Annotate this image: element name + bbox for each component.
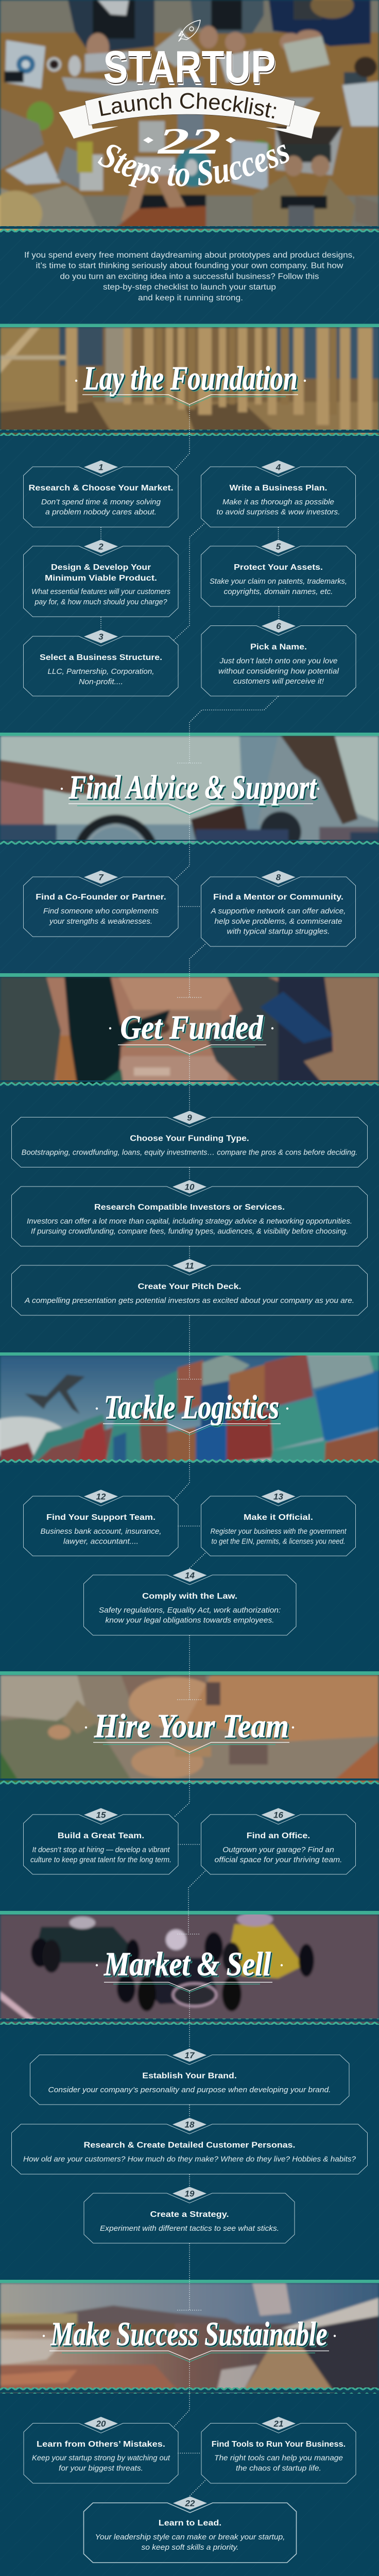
step title: Find Tools to Run Your Business.: [212, 2440, 346, 2449]
panel: Tackle Logistics steps: [0, 1465, 379, 1671]
step title: Find Your Support Team.: [46, 1513, 156, 1522]
heading: Lay the Foundation: [75, 360, 306, 406]
panel: Lay the Foundation steps: [0, 435, 379, 733]
step badge 3: [84, 630, 118, 643]
step description: [47, 668, 154, 686]
step badge 6: [262, 619, 296, 633]
step title: Research & Choose Your Market.: [29, 484, 173, 493]
card: step 1: [24, 461, 178, 527]
step description: Experiment with different tactics to see what sticks.: [100, 2225, 279, 2233]
step badge 21: 21: [273, 2419, 283, 2429]
step description: The right tools can help you manage: [214, 2454, 343, 2463]
step description: Safety regulations, Equality Act, work authorization:: [99, 1606, 281, 1615]
step description: with typical startup struggles.: [227, 927, 330, 936]
step description: [27, 1217, 352, 1235]
step title: Comply with the Law.: [142, 1592, 237, 1601]
step title: Choose Your Funding Type.: [130, 1134, 249, 1143]
step description: Make it as thorough as possible: [222, 498, 334, 506]
step description: Keep your startup strong by watching out: [32, 2454, 170, 2463]
wave divider: [0, 430, 379, 436]
step badge 1: 1: [98, 463, 104, 472]
step description: [210, 1528, 347, 1546]
banner photo: house framing: [0, 327, 379, 435]
step description: so keep soft skills a priority.: [141, 2544, 239, 2552]
title block: [59, 20, 320, 188]
step badge 12: [84, 1490, 118, 1503]
step title: Establish Your Brand.: [142, 2072, 237, 2080]
step description: for your biggest threats.: [59, 2465, 143, 2473]
step description: [95, 2533, 285, 2552]
card: step 16: [201, 1808, 355, 1874]
step title: Write a Business Plan.: [230, 484, 328, 493]
card: step 13: [201, 1490, 355, 1556]
step badge 11: 11: [185, 1261, 194, 1270]
card: step 6: [201, 619, 356, 696]
teal band: [0, 1671, 379, 1675]
wave divider: [0, 226, 379, 232]
card: step 10: [11, 1180, 368, 1246]
step description: It doesn’t stop at hiring — develop a vibrant: [32, 1846, 170, 1854]
step description: to avoid surprises & wow investors.: [216, 508, 340, 516]
step badge 2: [84, 540, 118, 553]
step badge 20: 20: [96, 2419, 106, 2429]
teal band: [0, 1911, 379, 1914]
step badge 15: [84, 1808, 118, 1822]
step title: Pick a Name.: [250, 643, 307, 651]
step badge 6: 6: [276, 621, 281, 631]
step badge 5: [262, 540, 296, 553]
step badge 10: [173, 1180, 206, 1193]
title: STARTUP: STARTUP: [103, 41, 276, 92]
step badge 2: 2: [98, 542, 104, 551]
step description: [214, 1846, 342, 1864]
step title: Learn to Lead.: [159, 2519, 221, 2528]
banner photo: shipping containers and plane: [0, 1355, 379, 1461]
step description: Stake your claim on patents, trademarks,: [210, 578, 347, 586]
panel: Find Advice & Support steps: [0, 845, 379, 973]
step description: [40, 1528, 162, 1546]
step description: [32, 2454, 170, 2473]
heading: Get Funded: Get Funded: [120, 1009, 263, 1046]
step description: [30, 1846, 171, 1864]
step title: Make it Official.: [244, 1513, 313, 1522]
step badge 21: [262, 2417, 296, 2430]
step badge 1: [84, 461, 118, 474]
connector: dotted path through all steps: [101, 405, 279, 2496]
step description: Business bank account, insurance,: [40, 1528, 162, 1536]
step description: culture to keep great talent for the long term.: [30, 1856, 171, 1864]
step description: A supportive network can offer advice,: [210, 907, 346, 916]
intro text: do you turn an exciting idea into a successful business? Follow this: [60, 272, 319, 281]
intro text: If you spend every free moment daydreaming about prototypes and product designs,: [24, 251, 355, 260]
icon: rocket: [179, 20, 200, 41]
step description: lawyer, accountant....: [63, 1537, 139, 1546]
step description: customers will perceive it!: [233, 677, 324, 686]
step description: Outgrown your garage? Find an: [222, 1846, 334, 1854]
step description: know your legal obligations towards employees.: [105, 1617, 274, 1625]
card: step 9: [11, 1111, 368, 1167]
card: step 19: [84, 2187, 295, 2243]
card: step 5: [201, 540, 355, 606]
step title: Find an Office.: [247, 1832, 310, 1840]
step badge 14: [173, 1568, 207, 1582]
card: step 11: [11, 1259, 368, 1315]
ribbon: Launch Checklist: Launch Checklist:: [98, 93, 276, 118]
card: step 17: [30, 2048, 349, 2105]
step badge 14: 14: [185, 1570, 195, 1581]
card: step 3: [24, 630, 178, 696]
step description: [216, 498, 340, 516]
step description: Investors can offer a lot more than capital, including strategy advice & networking opportunities.: [27, 1217, 352, 1226]
step title: Build a Great Team.: [58, 1832, 144, 1840]
title: Steps to Success: Steps to Success: [98, 144, 289, 188]
banner photo: team hands together: [0, 1675, 379, 1783]
card: step 12: [24, 1490, 178, 1556]
teal band: [0, 733, 379, 736]
panel: intro: [0, 231, 379, 324]
step badge 8: [262, 871, 296, 884]
intro text: it’s time to start thinking seriously about founding your own company. But how: [36, 262, 343, 270]
step badge 10: 10: [185, 1182, 195, 1192]
card: step 15: [24, 1808, 178, 1874]
step title: Create Your Pitch Deck.: [138, 1282, 241, 1291]
step title: Research Compatible Investors or Services.: [94, 1203, 285, 1212]
wave divider: [0, 2019, 379, 2025]
intro text: and keep it running strong.: [138, 294, 243, 302]
step badge 18: 18: [185, 2120, 195, 2130]
panel: Market & Sell steps: [0, 2024, 379, 2280]
step title: Select a Business Structure.: [40, 653, 162, 662]
step badge 5: 5: [276, 542, 281, 551]
title: 22: 22: [157, 121, 221, 162]
heading: Hire Your Team: Hire Your Team: [94, 1707, 289, 1745]
step title: Find a Co-Founder or Partner.: [36, 893, 166, 902]
step badge 7: 7: [98, 873, 104, 882]
step description: How old are your customers? How much do they make? Where do they live? Hobbies & habits?: [23, 2156, 356, 2164]
step badge 4: 4: [275, 463, 281, 472]
step title: [45, 563, 157, 583]
teal band: [0, 973, 379, 977]
heading: Tackle Logistics: Tackle Logistics: [104, 1388, 279, 1426]
step badge 20: [84, 2417, 118, 2430]
step badge 8: 8: [276, 873, 281, 882]
step description: [99, 1606, 281, 1625]
heading: Find Advice & Support: [61, 769, 319, 815]
step description: to get the EIN, permits, & licenses you need.: [211, 1537, 345, 1546]
step title: Learn from Others’ Mistakes.: [37, 2440, 165, 2449]
teal band: [0, 1352, 379, 1356]
banner photo: sailboat on the water: [0, 2283, 379, 2393]
banner photo: man in wheelchair: [0, 736, 379, 843]
step description: official space for your thriving team.: [214, 1856, 342, 1864]
step description: Non-profit....: [79, 678, 123, 686]
step badge 9: [173, 1111, 206, 1124]
step description: Don’t spend time & money solving: [41, 498, 161, 506]
card: step 14: [83, 1568, 296, 1635]
wave divider: [0, 840, 379, 846]
step description: [43, 907, 159, 926]
step description: What essential features will your customers: [31, 588, 170, 596]
title: 22: [143, 121, 236, 162]
step title: Create a Strategy.: [150, 2210, 229, 2219]
step description: Bootstrapping, crowdfunding, loans, equity investments… compare the pros & cons before deciding.: [22, 1149, 357, 1157]
step title: Minimum Viable Product.: [45, 574, 157, 583]
step description: the chaos of startup life.: [236, 2465, 321, 2473]
heading: Tackle Logistics: [96, 1388, 288, 1435]
step description: pay for, & how much should you charge?: [35, 598, 167, 606]
banner photo: racing cars: [0, 1914, 379, 2024]
step badge 7: [84, 871, 118, 884]
step description: [210, 907, 346, 936]
step description: [31, 588, 170, 606]
card: step 4: [201, 461, 355, 527]
step badge 17: 17: [185, 2050, 195, 2060]
step badge 16: 16: [273, 1810, 283, 1820]
step badge 13: 13: [273, 1492, 283, 1501]
panel: Get Funded steps: [0, 1086, 379, 1352]
step badge 22: 22: [185, 2499, 195, 2508]
step description: [210, 578, 347, 596]
step description: without considering how potential: [218, 668, 339, 676]
heading: Lay the Foundation: Lay the Foundation: [83, 360, 298, 397]
step badge 15: 15: [96, 1810, 106, 1820]
hero photo: team around a desk: [0, 0, 379, 231]
step badge 4: [262, 461, 296, 474]
banner photo: business handshake: [0, 977, 379, 1084]
step title: Find a Mentor or Community.: [213, 893, 343, 902]
wave divider: [0, 1778, 379, 1785]
step description: LLC, Partnership, Corporation,: [47, 668, 154, 676]
teal band: [0, 2280, 379, 2283]
intro text: step-by-step checklist to launch your startup: [103, 283, 276, 292]
step description: Consider your company’s personality and purpose when developing your brand.: [48, 2086, 331, 2094]
card: step 7: [24, 871, 178, 937]
wave divider: [0, 1080, 379, 1087]
card: step 22: [83, 2497, 297, 2563]
panel: Hire Your Team steps: [0, 1784, 379, 1911]
step description: [218, 657, 339, 686]
step description: Just don’t latch onto one you love: [219, 657, 338, 666]
step title: Design & Develop Your: [51, 563, 151, 572]
step badge 16: [262, 1808, 296, 1822]
step badge 12: 12: [96, 1492, 106, 1501]
step title: Protect Your Assets.: [234, 563, 323, 572]
step description: A compelling presentation gets potential investors as excited about your company as you are.: [24, 1297, 354, 1305]
card: step 18: [11, 2117, 368, 2174]
step badge 18: [173, 2117, 206, 2131]
step badge 19: [173, 2187, 206, 2200]
card: step 2: [24, 540, 178, 617]
teal band: [0, 324, 379, 327]
wave divider: [0, 1459, 379, 1465]
step description: Register your business with the government: [210, 1528, 347, 1536]
step description: a problem nobody cares about.: [45, 508, 157, 516]
step description: [41, 498, 161, 516]
step description: Your leadership style can make or break your startup,: [95, 2533, 285, 2541]
step badge 22: [173, 2497, 207, 2510]
card: step 21: [201, 2417, 356, 2483]
step badge 17: [173, 2048, 206, 2062]
step badge 3: 3: [98, 632, 104, 642]
step description: help solve problems, & commiserate: [214, 918, 342, 926]
step badge 19: 19: [185, 2189, 195, 2199]
intro text: [24, 251, 355, 302]
step badge 9: 9: [187, 1113, 192, 1123]
step badge 13: [262, 1490, 296, 1503]
step description: [214, 2454, 343, 2473]
panel: Make Success Sustainable steps: [0, 2393, 379, 2576]
step badge 11: [173, 1259, 206, 1273]
step description: your strengths & weaknesses.: [49, 918, 152, 926]
step description: Find someone who complements: [43, 907, 159, 916]
step title: Research & Create Detailed Customer Personas.: [83, 2141, 296, 2149]
ribbon: Launch Checklist: [59, 87, 320, 139]
step description: If pursuing crowdfunding, compare fees, funding types, audiences, & visibility before choosing.: [31, 1227, 348, 1235]
heading: Market & Sell: Market & Sell: [104, 1945, 271, 1983]
card: step 8: [201, 871, 355, 946]
wave divider: [0, 2387, 379, 2394]
step description: copyrights, domain names, etc.: [223, 588, 333, 596]
card: step 20: [24, 2417, 178, 2483]
